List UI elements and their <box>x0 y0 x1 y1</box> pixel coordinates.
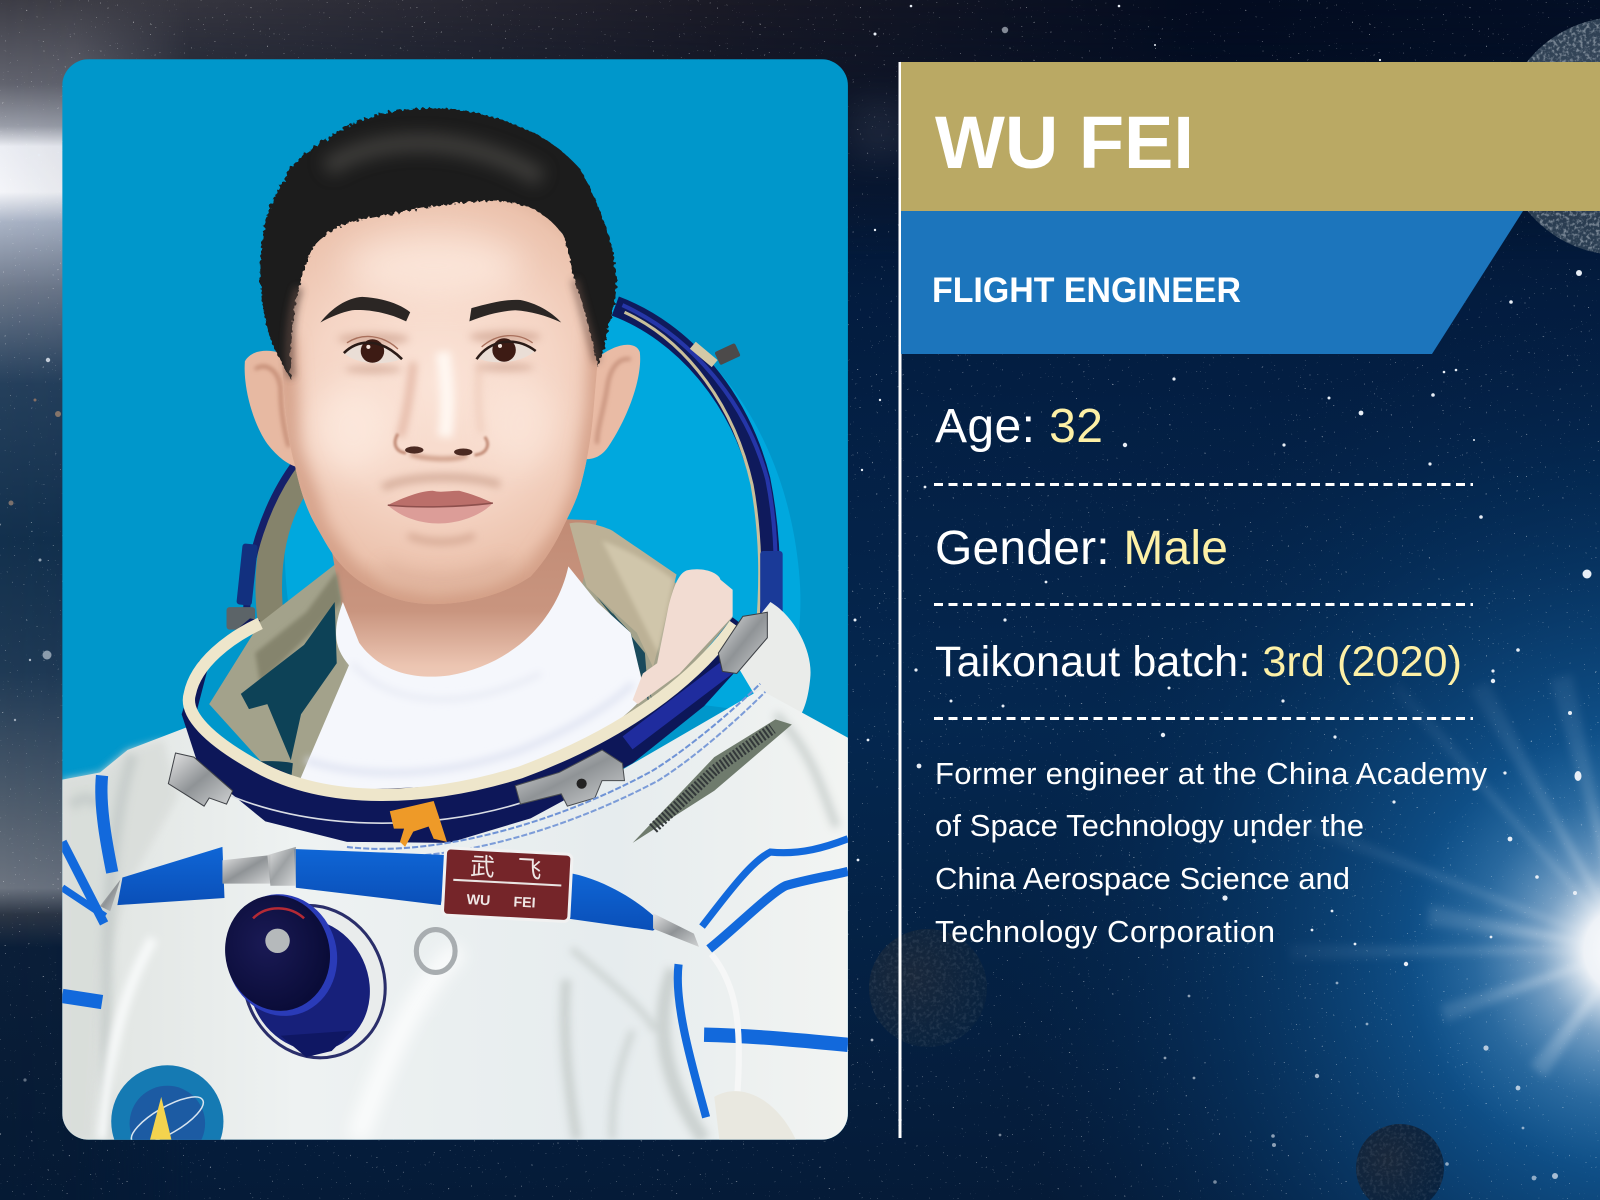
biography text <box>935 756 1488 949</box>
field: age: Age: 32 <box>935 400 1103 453</box>
moustache shadow <box>383 477 500 488</box>
role text: FLIGHT ENGINEER <box>932 271 1241 310</box>
zipper <box>633 719 792 843</box>
planet: top right <box>1527 18 1600 254</box>
field: taikonaut batch: Taikonaut batch: 3rd (2020) <box>935 638 1462 686</box>
glove <box>633 569 733 704</box>
biography text: Former engineer at the China Academy <box>935 756 1488 791</box>
ring clasp: right <box>718 612 767 673</box>
left arm panel <box>62 740 179 1140</box>
vertical divider <box>898 62 902 1138</box>
name badge: 武 <box>470 853 496 882</box>
ring: navy band <box>182 617 763 843</box>
ring clasp: orange <box>390 801 447 847</box>
eye: left <box>344 336 402 363</box>
collar lining: teal <box>241 602 337 760</box>
planet: bottom <box>1356 1124 1444 1200</box>
neck ring blue stitching <box>347 684 760 849</box>
divider: batch <box>934 717 1473 720</box>
ring clasp: middle <box>515 750 624 806</box>
suit shading <box>71 714 837 1140</box>
ring: cream inner band <box>189 623 735 795</box>
pressure valve disc <box>212 882 410 1081</box>
ears <box>245 345 640 467</box>
neck skin <box>332 519 597 677</box>
face shadow <box>285 235 600 608</box>
chest strap <box>100 847 699 947</box>
biography text: Technology Corporation <box>935 914 1275 949</box>
name badge: 飞 <box>516 856 542 884</box>
panel: portrait photo <box>62 59 848 1178</box>
neck ring <box>182 617 763 843</box>
suit body <box>62 690 848 1140</box>
right shoulder collar lump <box>740 602 811 713</box>
photo backdrop <box>62 59 848 1140</box>
divider: gender <box>934 603 1473 606</box>
divider: age <box>934 483 1473 486</box>
ring clasp: left <box>168 753 233 806</box>
helmet ring: rear right <box>615 305 783 645</box>
mission patch <box>111 1065 223 1178</box>
name text: WU FEI <box>935 101 1194 184</box>
hair <box>260 108 616 380</box>
metal O ring <box>416 930 455 972</box>
helmet ring: rear left <box>227 461 306 630</box>
white turtleneck <box>294 566 645 802</box>
nose <box>395 352 488 459</box>
name badge: FEI <box>513 894 536 912</box>
biography text: China Aerospace Science and <box>935 861 1350 896</box>
collar fabric: right beige <box>569 523 677 704</box>
eye socket shadow <box>338 331 541 373</box>
biography text: of Space Technology under the <box>935 808 1364 843</box>
name badge: WU <box>466 892 491 909</box>
mouth <box>388 491 493 523</box>
field: gender: Gender: Male <box>935 522 1228 575</box>
head and face <box>260 108 616 608</box>
banner: name <box>901 62 1600 211</box>
collar fabric: left olive <box>240 572 344 775</box>
eyebrows <box>320 297 561 322</box>
helmet interior light backdrop <box>285 301 800 714</box>
name badge <box>442 848 572 922</box>
eye: right <box>477 336 536 362</box>
planet: centre dark <box>869 929 987 1047</box>
banner: role <box>901 211 1523 354</box>
suit cable and lower glove <box>711 954 796 1140</box>
starburst: right edge <box>1290 674 1600 1170</box>
collar interior base <box>209 530 733 778</box>
sleeve stripes <box>62 776 848 1117</box>
